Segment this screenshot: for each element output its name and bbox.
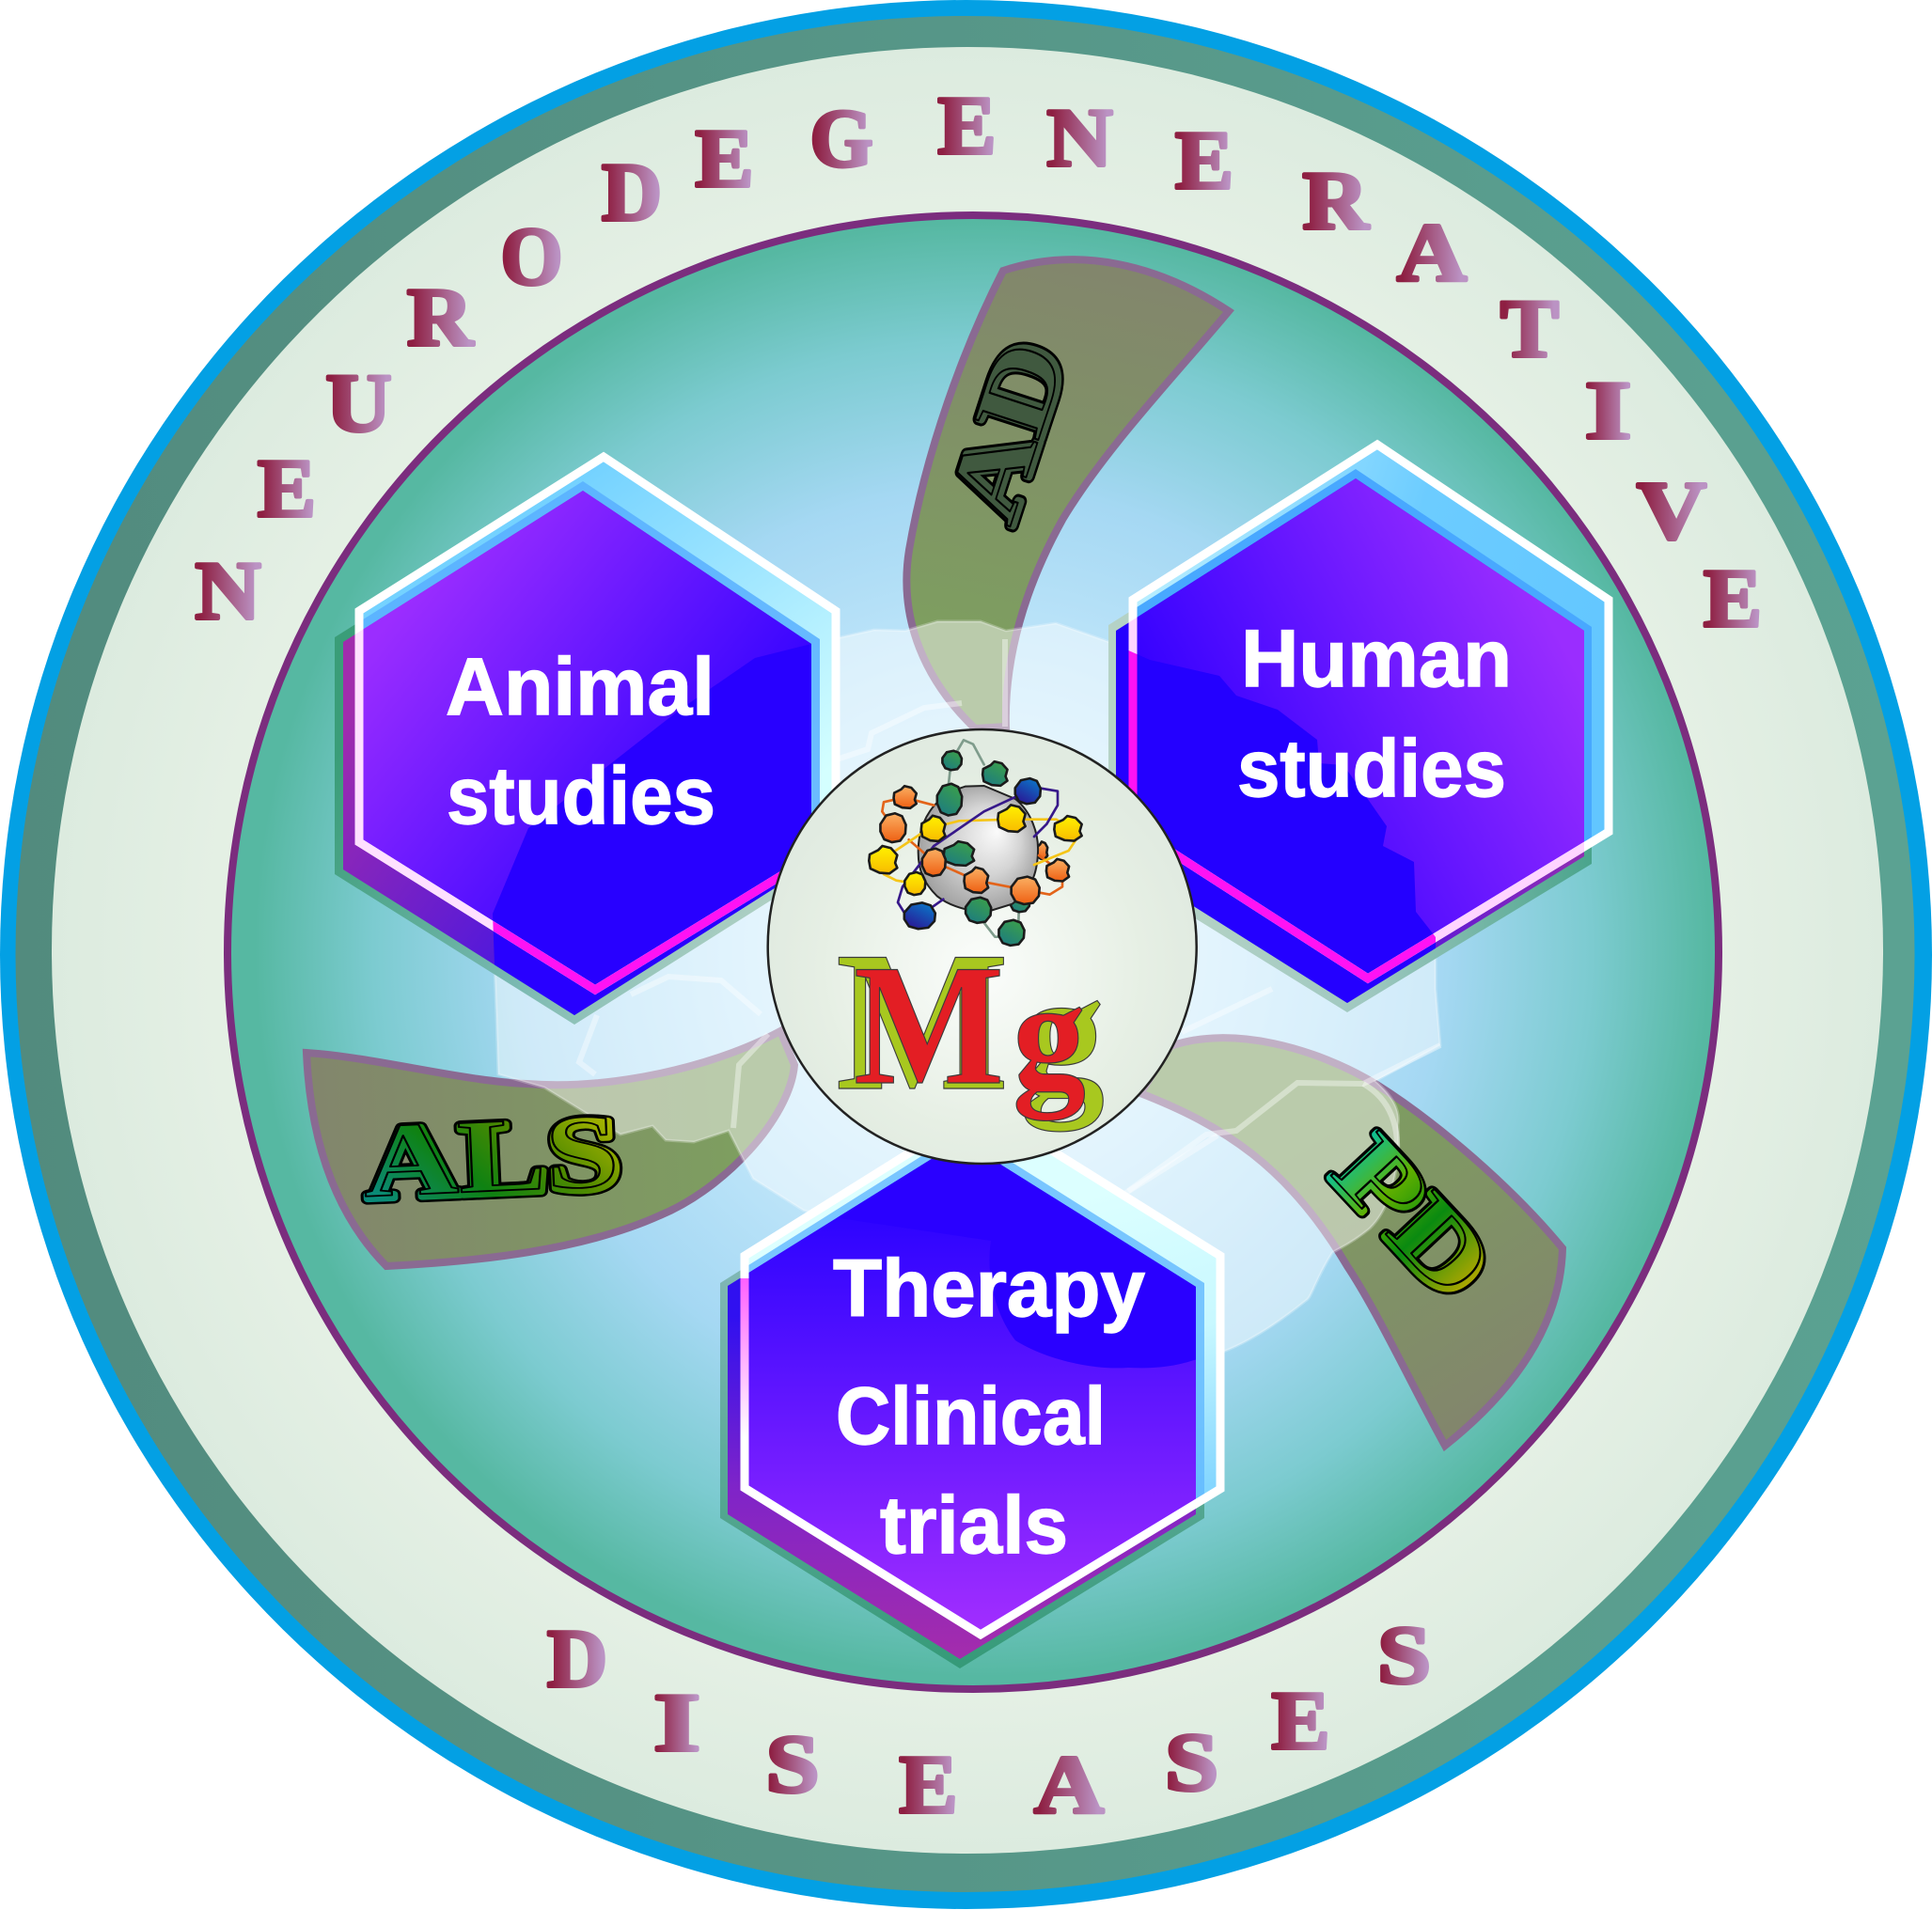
label: Therapy Clinical trials: trials xyxy=(880,1480,1068,1571)
label: ALS: ALS xyxy=(360,1092,621,1220)
label: Human studies xyxy=(1237,614,1512,814)
ring title: DISEASES: S xyxy=(765,1719,820,1810)
ring title: DISEASES: S xyxy=(1165,1717,1218,1808)
label: PD: PD xyxy=(1312,1116,1514,1322)
symbol: Mg: g xyxy=(1013,948,1086,1121)
disease petals xyxy=(306,259,1563,1446)
label: ALS: ALS xyxy=(363,1095,623,1223)
label: ALS: ALS xyxy=(363,1095,623,1223)
label: PD: PD xyxy=(1312,1113,1515,1318)
inner circle with purple rim xyxy=(228,215,1719,1689)
ring title: NEURODEGENERATIVE: N xyxy=(196,546,261,637)
petal: AD xyxy=(906,259,1229,728)
label: Animal studies: Animal xyxy=(446,642,715,732)
ring title: NEURODEGENERATIVE: R xyxy=(1303,156,1370,247)
ring title: DISEASES: A xyxy=(1034,1740,1104,1831)
hexagon: Therapy / Clinical trials xyxy=(720,1151,1224,1668)
ring title: NEURODEGENERATIVE: I xyxy=(1585,366,1632,457)
ring title: DISEASES: I xyxy=(653,1678,700,1769)
ring title: NEURODEGENERATIVE: E xyxy=(938,81,997,172)
label: Therapy Clinical trials xyxy=(833,1244,1145,1571)
metal sphere xyxy=(919,786,1038,912)
ring title: DISEASES: S xyxy=(1377,1610,1431,1701)
label: Animal studies xyxy=(446,642,715,841)
ring title: NEURODEGENERATIVE: O xyxy=(500,211,562,303)
label: AD: AD xyxy=(928,327,1091,534)
ring title: DISEASES: D xyxy=(547,1614,607,1705)
ring title: NEURODEGENERATIVE: N xyxy=(1047,93,1113,184)
ring title: NEURODEGENERATIVE xyxy=(196,81,1762,645)
ring title: NEURODEGENERATIVE: R xyxy=(407,273,475,364)
hexagon: Human studies xyxy=(1108,440,1613,1012)
label: Therapy Clinical trials: Clinical xyxy=(836,1371,1106,1462)
symbol: Mg: M xyxy=(836,911,1009,1133)
ring title: NEURODEGENERATIVE: A xyxy=(1397,208,1467,299)
petal: PD xyxy=(1140,1038,1563,1446)
ring title: NEURODEGENERATIVE: T xyxy=(1500,284,1559,375)
label: Human studies: studies xyxy=(1237,724,1506,814)
label: Therapy Clinical trials: Therapy xyxy=(833,1244,1145,1334)
ring title: DISEASES: E xyxy=(1271,1676,1329,1767)
hexagon: Animal studies xyxy=(335,451,840,1025)
label: AD: AD xyxy=(925,328,1087,535)
label: PD: PD xyxy=(1312,1116,1514,1322)
translucent brain silhouette xyxy=(493,621,1440,1368)
centre circle: Mg xyxy=(768,729,1197,1164)
label: Human studies: Human xyxy=(1241,614,1512,704)
ring title: DISEASES: E xyxy=(899,1740,957,1831)
ring title: NEURODEGENERATIVE: V xyxy=(1637,466,1706,556)
ring title: NEURODEGENERATIVE: E xyxy=(258,444,316,535)
ring title: NEURODEGENERATIVE: U xyxy=(325,358,391,449)
symbol: Mg: M xyxy=(854,929,1004,1120)
icon: magnesium atom xyxy=(869,740,1082,946)
petal: ALS xyxy=(306,1031,794,1266)
symbol: Mg: g xyxy=(1020,934,1105,1132)
ring title: NEURODEGENERATIVE: E xyxy=(1175,116,1233,207)
label: AD: AD xyxy=(928,327,1091,534)
ring title: NEURODEGENERATIVE: D xyxy=(602,148,662,239)
ring title: DISEASES xyxy=(547,1610,1431,1831)
ring title: NEURODEGENERATIVE: G xyxy=(810,94,872,184)
label: Animal studies: studies xyxy=(447,751,715,841)
ring title: NEURODEGENERATIVE: E xyxy=(696,114,754,205)
ring title: NEURODEGENERATIVE: E xyxy=(1704,554,1762,645)
